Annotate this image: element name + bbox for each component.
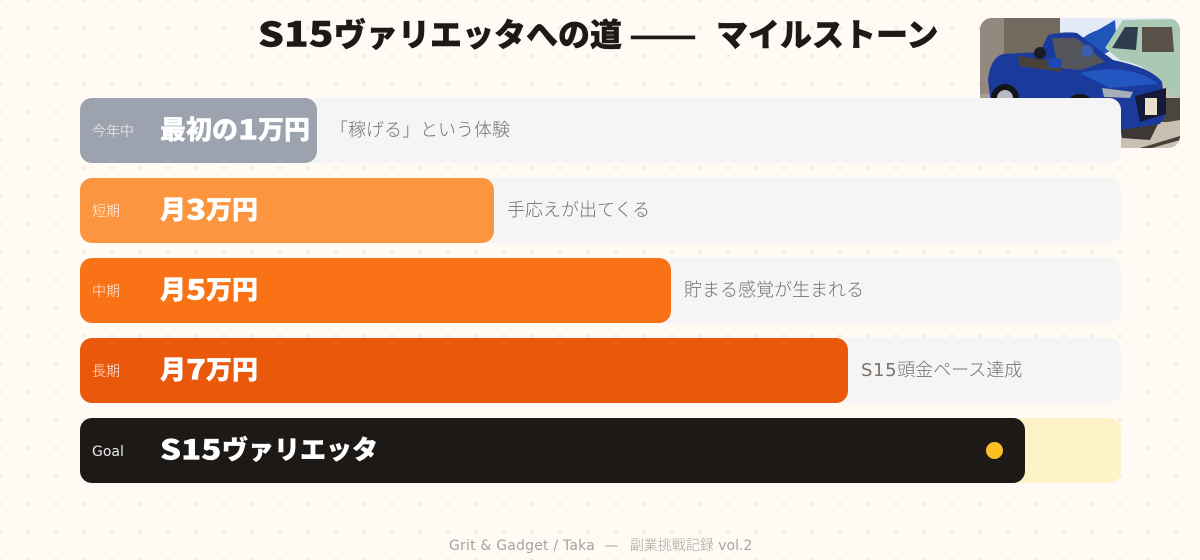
photo: blue S15 Varietta convertible (980, 18, 1180, 148)
period label: 中期 (92, 281, 120, 301)
bar (80, 98, 317, 163)
milestone: 月 万円 (160, 270, 258, 307)
icon: goal dot (986, 442, 1003, 459)
milestone: ヴァリエッタ (222, 430, 378, 467)
milestone: 1 (238, 109, 258, 148)
track (80, 418, 1121, 483)
milestone: S15 (160, 429, 221, 468)
row: short term (80, 178, 1121, 243)
row: this year (80, 98, 1121, 163)
period label: Goal (92, 444, 124, 460)
bar (80, 338, 848, 403)
milestone: 3 (186, 189, 206, 228)
title: ヴァリエッタへの道 —— マイルストーン (334, 10, 938, 56)
bar (80, 258, 671, 323)
note: 手応えが出てくる (507, 196, 650, 222)
milestone: 月 万円 (160, 350, 258, 387)
note: 「稼げる」という体験 (330, 116, 510, 142)
row: mid term (80, 258, 1121, 323)
footer: Grit & Gadget / Taka — 副業挑戦記録 vol.2 (449, 535, 752, 555)
track (80, 338, 1121, 403)
track (80, 258, 1121, 323)
milestone: 7 (186, 349, 206, 388)
bar (80, 178, 494, 243)
bar (80, 418, 1025, 483)
row: long term (80, 338, 1121, 403)
milestone: 最初の 万円 (160, 110, 310, 147)
milestone: 月 万円 (160, 190, 258, 227)
milestone: 5 (186, 269, 206, 308)
note: 貯まる感覚が生まれる (684, 276, 864, 302)
period label: 長期 (92, 361, 120, 381)
note: S15頭金ペース達成 (861, 356, 1022, 382)
period label: 今年中 (92, 121, 134, 141)
title: S15 (258, 8, 333, 57)
track (80, 98, 1121, 163)
row: goal (80, 418, 1121, 483)
track (80, 178, 1121, 243)
period label: 短期 (92, 201, 120, 221)
milestone (160, 429, 378, 468)
